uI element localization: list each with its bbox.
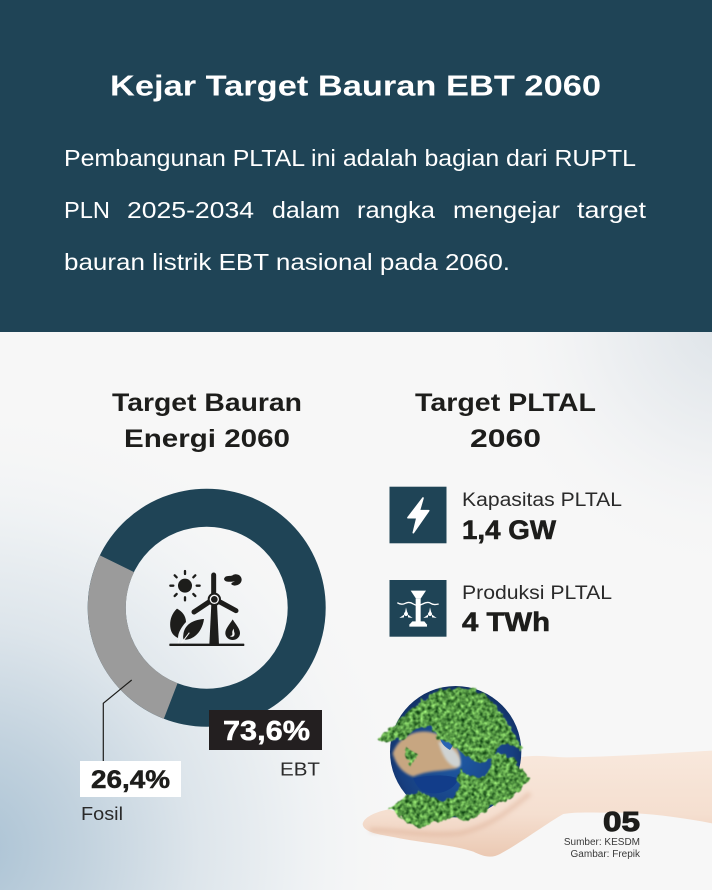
icon: tidal turbine	[390, 580, 446, 637]
callout: EBT 73,6%	[209, 710, 322, 780]
intro paragraph: dalam	[272, 197, 340, 223]
heading: target bauran energi: Target Bauran	[112, 389, 302, 417]
callout line: fosil	[103, 680, 132, 761]
heading: target PLTAL: Target PLTAL	[415, 389, 596, 417]
source credits: Sumber: KESDM	[564, 837, 640, 848]
foliage	[377, 688, 530, 827]
intro paragraph: bauran listrik EBT nasional pada 2060.	[64, 249, 510, 275]
stat: kapasitas PLTAL: Kapasitas PLTAL	[462, 490, 622, 511]
intro paragraph: PLN	[64, 197, 110, 223]
heading: target bauran energi: Energi 2060	[124, 425, 290, 453]
stat: kapasitas PLTAL	[390, 487, 622, 545]
heading: target PLTAL: 2060	[470, 425, 541, 453]
callout: fosil 26,4%: Fosil	[81, 804, 123, 824]
stat: produksi PLTAL: Produksi PLTAL	[462, 583, 612, 604]
stat: kapasitas PLTAL: 1,4 GW	[462, 515, 557, 545]
globe	[390, 686, 521, 817]
page number: 05	[603, 806, 640, 837]
donut chart	[107, 508, 307, 708]
heading: target bauran energi	[112, 389, 302, 453]
intro paragraph: mengejar	[453, 197, 560, 223]
stat: produksi PLTAL	[390, 580, 612, 637]
source credits: Gambar: Frepik	[571, 849, 641, 860]
heading: target PLTAL	[415, 389, 596, 453]
intro paragraph: Pembangunan PLTAL ini adalah bagian dari RUPTL	[64, 145, 636, 171]
icon: renewable energy	[169, 571, 244, 646]
panel: header band	[0, 0, 712, 332]
title: Kejar Target Bauran EBT 2060	[110, 70, 601, 102]
stat: produksi PLTAL: 4 TWh	[462, 607, 550, 637]
hand	[363, 751, 712, 857]
intro paragraph: 2025-2034	[127, 197, 254, 223]
illustration: hand holding leafy globe	[363, 686, 712, 857]
source credits	[564, 837, 641, 860]
intro paragraph	[64, 145, 647, 275]
icon: lightning bolt	[390, 487, 446, 543]
background: lower section	[0, 332, 712, 890]
intro paragraph: rangka	[357, 197, 436, 223]
callout: EBT 73,6%: 73,6%	[223, 715, 310, 746]
callout: fosil 26,4%: 26,4%	[91, 766, 170, 794]
callout: EBT 73,6%: EBT	[280, 760, 320, 780]
intro paragraph: target	[577, 197, 647, 223]
callout: fosil 26,4%	[80, 761, 181, 824]
